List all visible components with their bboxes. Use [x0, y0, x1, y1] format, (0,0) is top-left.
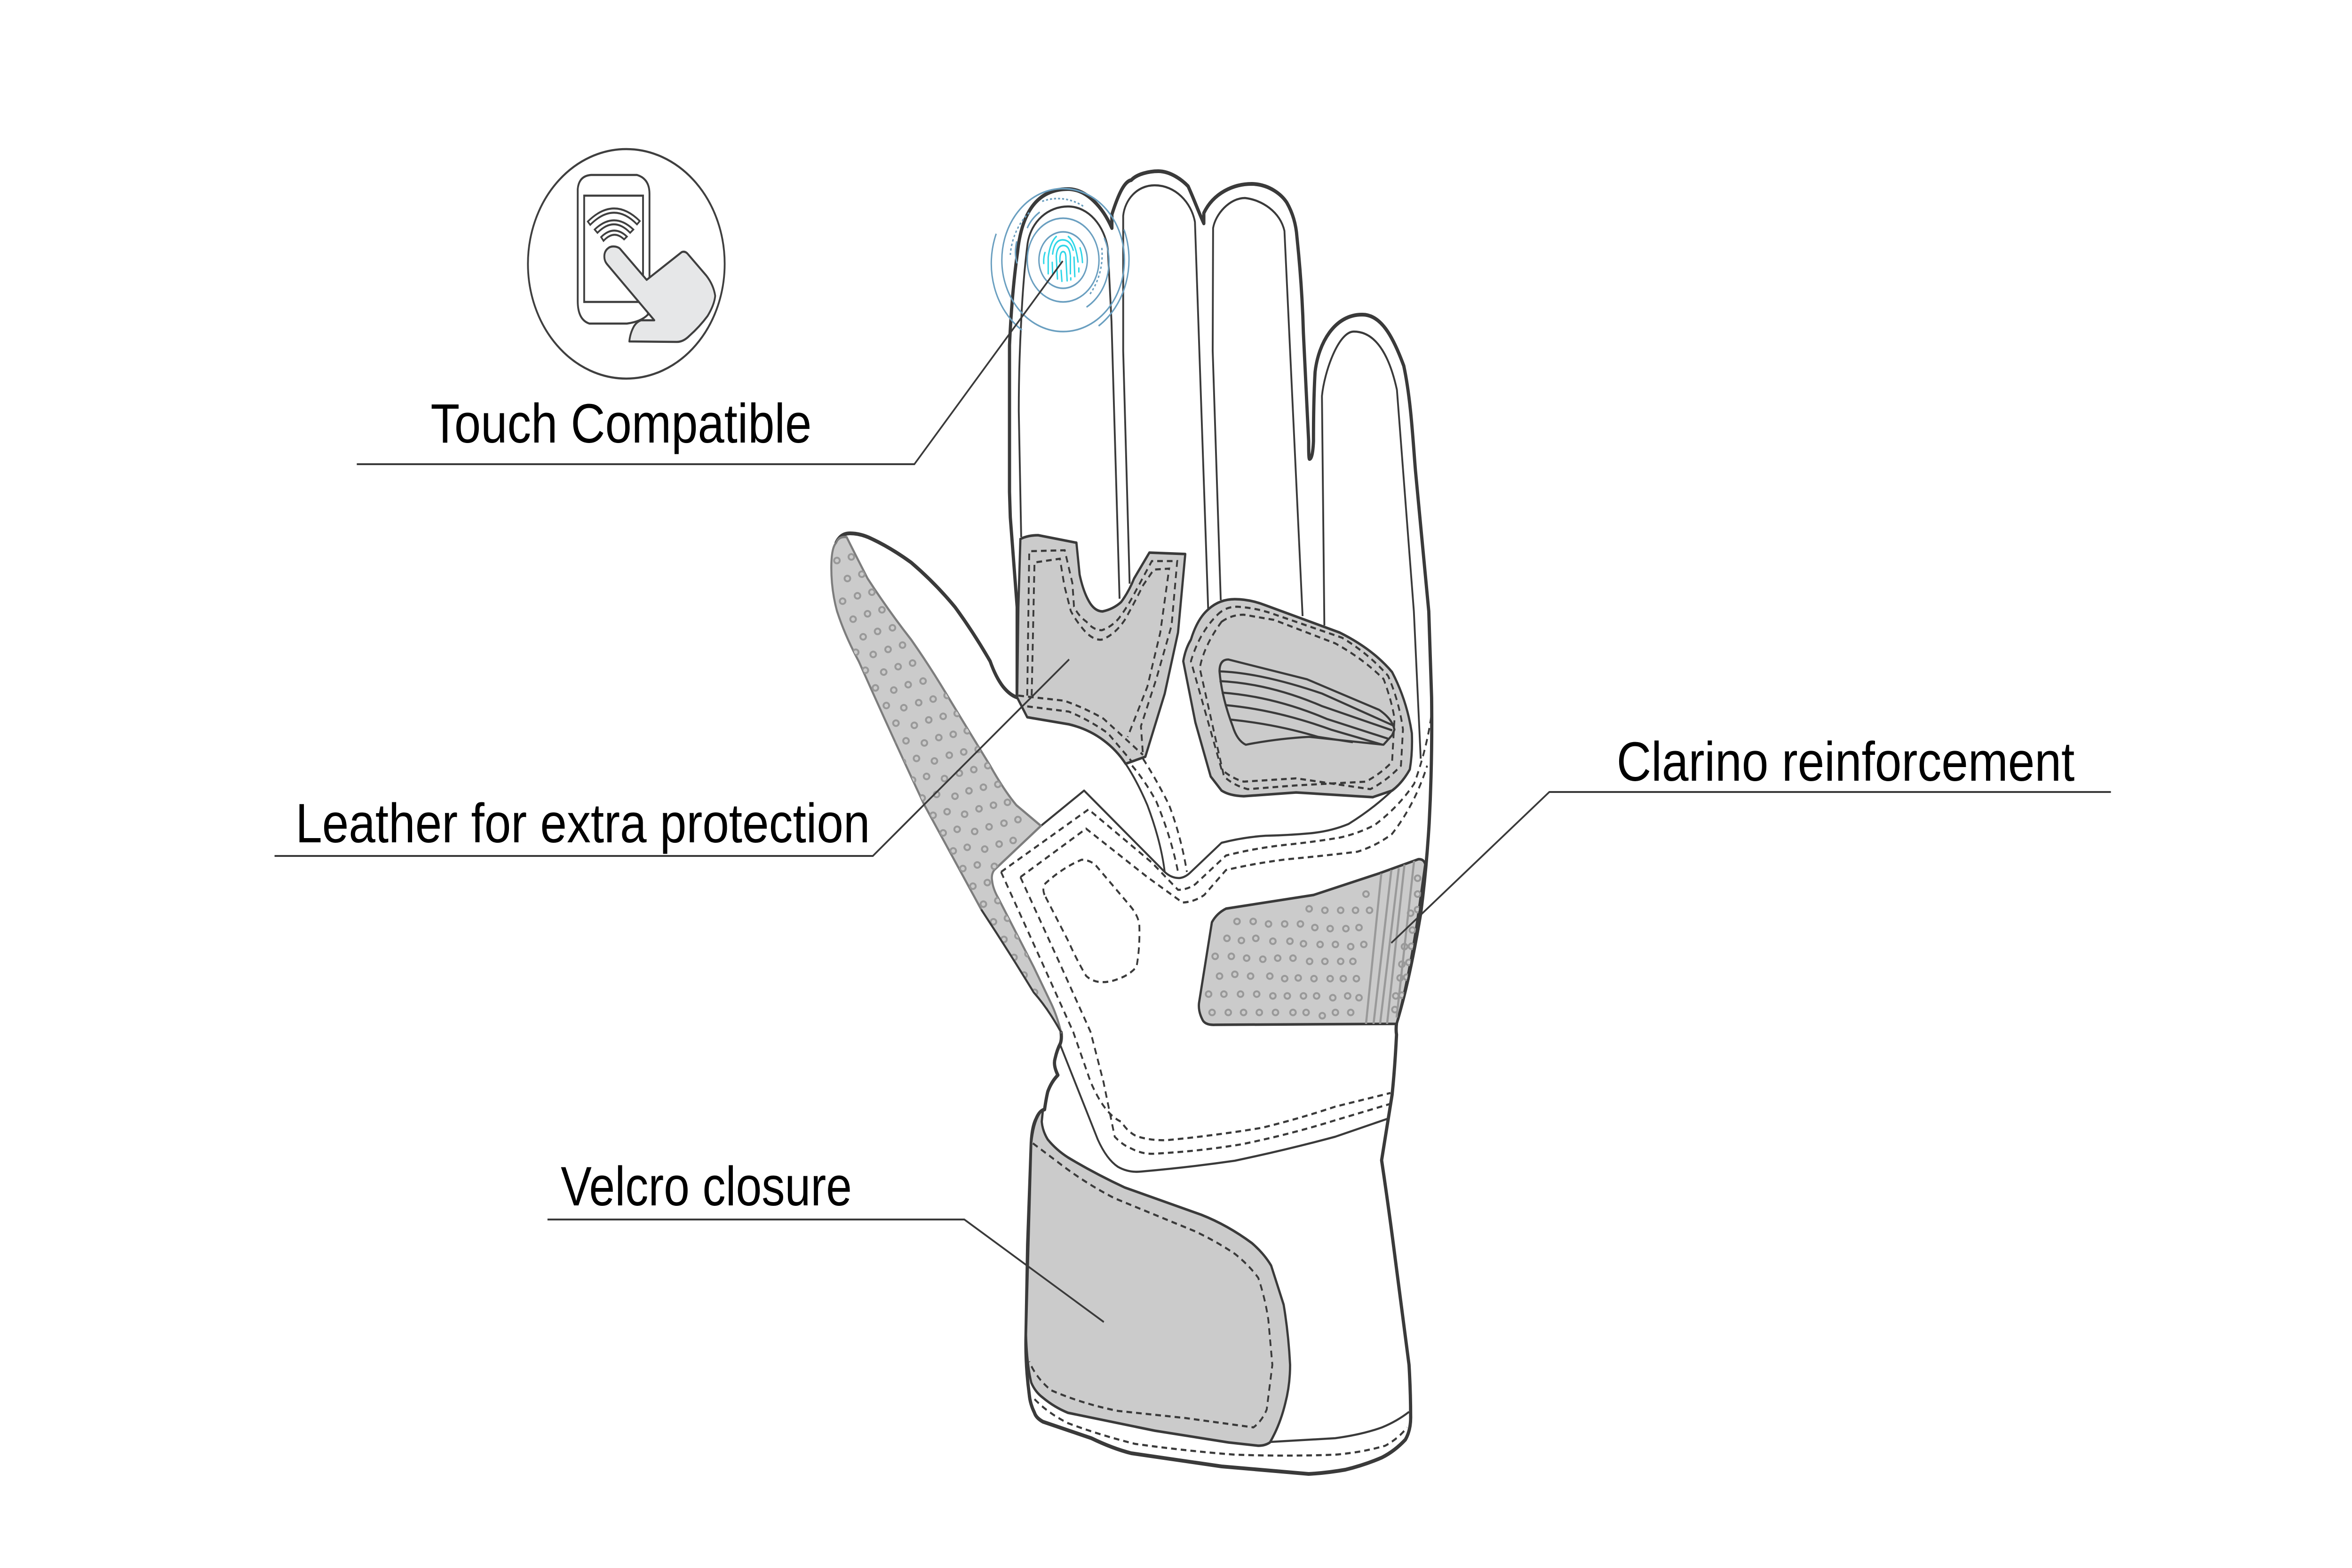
- callout: Clarino reinforcement: [1391, 731, 2111, 943]
- heading: Clarino reinforcement: [1617, 731, 2074, 793]
- leader line: [275, 659, 1069, 856]
- heading: Touch Compatible: [430, 393, 811, 455]
- panel: leather protection patch: [1017, 535, 1185, 764]
- leader line: [357, 261, 1063, 464]
- heading: Leather for extra protection: [295, 793, 870, 855]
- palm panel seams: [1041, 764, 1409, 1442]
- callout: Velcro closure: [548, 1156, 1104, 1322]
- heading: Velcro closure: [561, 1156, 852, 1218]
- phone body: [578, 175, 650, 324]
- pad stitching: [1191, 607, 1403, 789]
- finger inner seams: [1019, 185, 1421, 759]
- fingerprint rings: [991, 189, 1129, 332]
- phone screen: [584, 196, 643, 302]
- palm stitching: [1001, 713, 1431, 1456]
- leader line: [548, 1220, 1104, 1322]
- fingerprint ridges: [1044, 237, 1082, 281]
- panel: clarino reinforcement: [1199, 859, 1425, 1025]
- ribbed insert: [1220, 659, 1394, 745]
- clarino perforation rings: [1208, 861, 1418, 1025]
- icon: phone with touching hand: [528, 149, 725, 379]
- thumb top outline: [836, 533, 1017, 697]
- velcro stitching: [1029, 1143, 1272, 1427]
- glove illustration: [831, 171, 1432, 1474]
- patch stitching: [1027, 550, 1177, 755]
- icon: touch fingerprint on index finger: [991, 189, 1129, 332]
- panel: velcro closure: [1026, 1109, 1290, 1446]
- thumb lower edge: [981, 910, 1061, 1032]
- callout: Leather for extra protection: [275, 659, 1069, 856]
- icon circle: [528, 149, 725, 379]
- pointing hand: [604, 246, 715, 342]
- callout: Touch Compatible: [357, 261, 1063, 464]
- wifi signal: [588, 208, 640, 241]
- panel: palm pad: [1183, 599, 1412, 797]
- leader line: [1391, 792, 2111, 943]
- panel: thumb perforated strip: [831, 537, 1061, 1032]
- thumb perforation rings: [837, 557, 1045, 1010]
- glove outer outline: [1009, 171, 1432, 1474]
